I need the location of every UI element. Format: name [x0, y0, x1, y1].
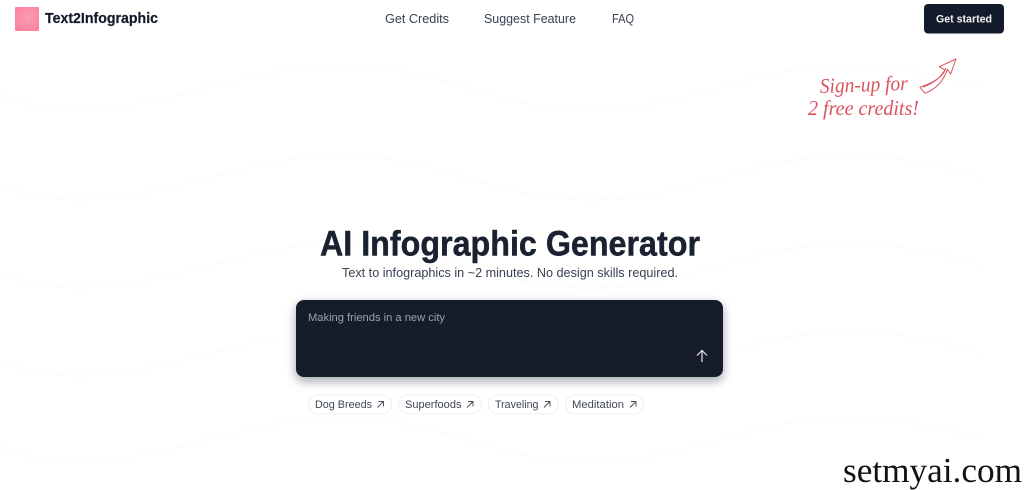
chip: traveling: Traveling [495, 399, 538, 411]
chip: superfoods: Superfoods [405, 399, 462, 411]
logo icon [15, 7, 39, 31]
background dotted waves [0, 66, 980, 462]
chip: traveling [488, 395, 558, 414]
callout text line 2: 2 free credits! [808, 96, 919, 120]
subtitle: Text to infographics in ~2 minutes. No design skills required. [342, 265, 678, 280]
sign-up callout [808, 59, 956, 120]
placeholder text: Making friends in a new city [308, 312, 445, 324]
watermark: setmyai.com [843, 451, 1022, 490]
logo wordmark: Text2Infographic [45, 11, 158, 27]
nav: faq: FAQ [612, 12, 634, 26]
nav: suggest feature: Suggest Feature [484, 12, 576, 26]
nav: get credits: Get Credits [385, 12, 449, 26]
icon: hand-drawn arrow [920, 59, 956, 93]
example topic chips [308, 395, 644, 414]
title: AI Infographic Generator [320, 224, 700, 264]
chip: dog breeds: Dog Breeds [315, 399, 372, 411]
get started button [924, 4, 1004, 34]
callout text: Sign-up for [819, 71, 909, 98]
chip: meditation [566, 395, 644, 414]
chip: meditation: Meditation [572, 399, 624, 411]
chip: dog breeds [308, 395, 392, 414]
get started button: Get started [936, 14, 992, 26]
icon: submit arrow [697, 350, 707, 362]
logo [15, 7, 158, 31]
chip: superfoods [398, 395, 482, 414]
navigation links [385, 12, 634, 26]
prompt input panel [296, 300, 723, 377]
